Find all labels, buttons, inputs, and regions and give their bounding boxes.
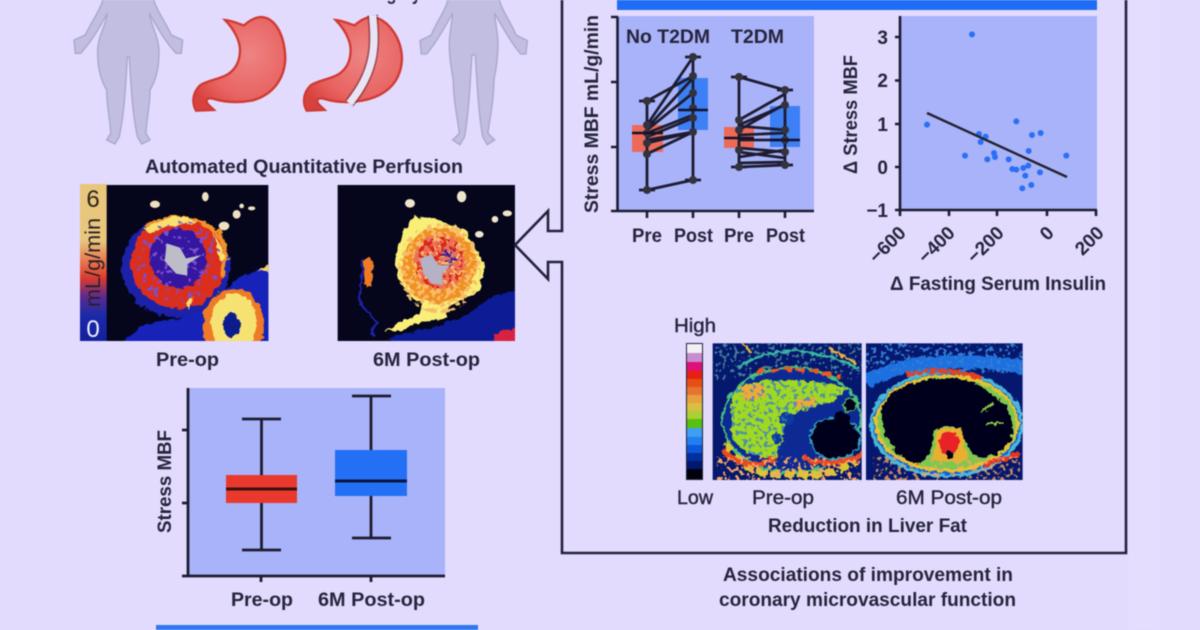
x tick labels: −600	[865, 223, 911, 268]
x label: Pre-op: Pre-op	[231, 590, 293, 611]
axes	[895, 16, 1097, 216]
legend: colour scale bar	[80, 184, 107, 341]
y tick labels	[866, 28, 888, 222]
axis label: Stress MBF: Stress MBF	[155, 430, 176, 533]
label: Pre-op perfusion: Pre-op	[156, 350, 219, 371]
panel: liver fat images	[674, 316, 1023, 537]
paired lines: no T2DM	[639, 53, 701, 194]
median: pre-op	[226, 488, 297, 490]
x labels: Post	[674, 226, 714, 247]
y tick labels: 0	[877, 158, 888, 179]
chart: stress MBF by diabetes status	[582, 15, 814, 247]
x labels: Pre	[724, 226, 754, 247]
caption: associations: coronary microvascular function	[719, 590, 1016, 611]
panel: pre-op perfusion map	[79, 183, 270, 342]
icon: stomach after sleeve resection	[304, 15, 402, 111]
legend: liver fat colour scale	[686, 343, 703, 480]
y tick labels: 2	[877, 71, 888, 92]
paired lines: T2DM	[731, 73, 793, 171]
x label: 6M Post-op: 6M Post-op	[318, 590, 425, 611]
icon: intact stomach	[193, 17, 285, 111]
box: no T2DM pre	[632, 125, 663, 152]
box: no T2DM post	[678, 78, 708, 130]
axis label: delta stress MBF: Δ Stress MBF	[841, 55, 862, 174]
image: post-op perfusion map	[338, 185, 518, 345]
axes	[611, 17, 814, 218]
y tick labels: 1	[877, 115, 888, 136]
label: liver Pre-op: Pre-op	[752, 488, 814, 509]
box medians	[632, 110, 800, 140]
median: post-op	[335, 480, 407, 482]
scatter points	[924, 31, 1069, 191]
x tick labels	[865, 223, 1109, 268]
legend value 6: 6	[86, 186, 100, 213]
panel outline with arrow	[515, 0, 1126, 553]
image: liver post-op	[866, 343, 1023, 480]
whisker: post-op	[352, 396, 391, 538]
box: post-op	[335, 450, 407, 496]
y tick labels: 3	[877, 28, 888, 49]
x labels: Post	[766, 226, 806, 247]
x labels	[632, 226, 806, 247]
chart: stress MBF box plot	[155, 388, 445, 611]
bar: top-right blue banner	[617, 0, 1097, 10]
heading: Reduction in Liver Fat: Reduction in Liver Fat	[768, 516, 968, 537]
axis label: Stress MBF mL/g/min: Stress MBF mL/g/min	[582, 15, 603, 213]
axis label: delta fasting serum insulin: Δ Fasting Serum Insulin	[890, 274, 1106, 295]
label: 6M Post-op perfusion: 6M Post-op	[373, 350, 480, 371]
trend line	[927, 113, 1067, 177]
whisker: pre-op	[242, 419, 281, 550]
box: T2DM pre	[724, 127, 754, 148]
x tick labels: 200	[1071, 223, 1109, 260]
caption: associations: Associations of improvement in	[723, 565, 1013, 586]
x labels: Pre	[632, 226, 662, 247]
box: T2DM post	[770, 106, 800, 147]
x tick labels: −200	[963, 223, 1009, 268]
heading: Automated Quantitative Perfusion: Automated Quantitative Perfusion	[145, 157, 463, 178]
image: liver pre-op	[713, 343, 863, 480]
x tick labels: −400	[914, 223, 960, 268]
caption: associations	[719, 565, 1016, 611]
y tick labels: −1	[866, 201, 888, 222]
label: liver 6M Post-op: 6M Post-op	[896, 488, 1002, 509]
x tick labels: 0	[1036, 223, 1059, 245]
legend value 0: 0	[86, 316, 100, 343]
box: pre-op	[226, 475, 297, 503]
label: Low: Low	[677, 488, 713, 509]
label: No T2DM: No T2DM	[626, 27, 710, 48]
icon: pre-operative body silhouette	[74, 0, 183, 144]
image: pre-op perfusion map	[106, 184, 270, 342]
chart: scatter of stress MBF vs fasting insulin	[841, 16, 1109, 295]
bar: bottom-left blue banner	[156, 625, 478, 630]
icon: post-operative body silhouette	[420, 0, 527, 145]
label: T2DM: T2DM	[731, 27, 784, 48]
label: High: High	[674, 316, 716, 337]
legend unit: mL/g/min	[82, 218, 105, 307]
